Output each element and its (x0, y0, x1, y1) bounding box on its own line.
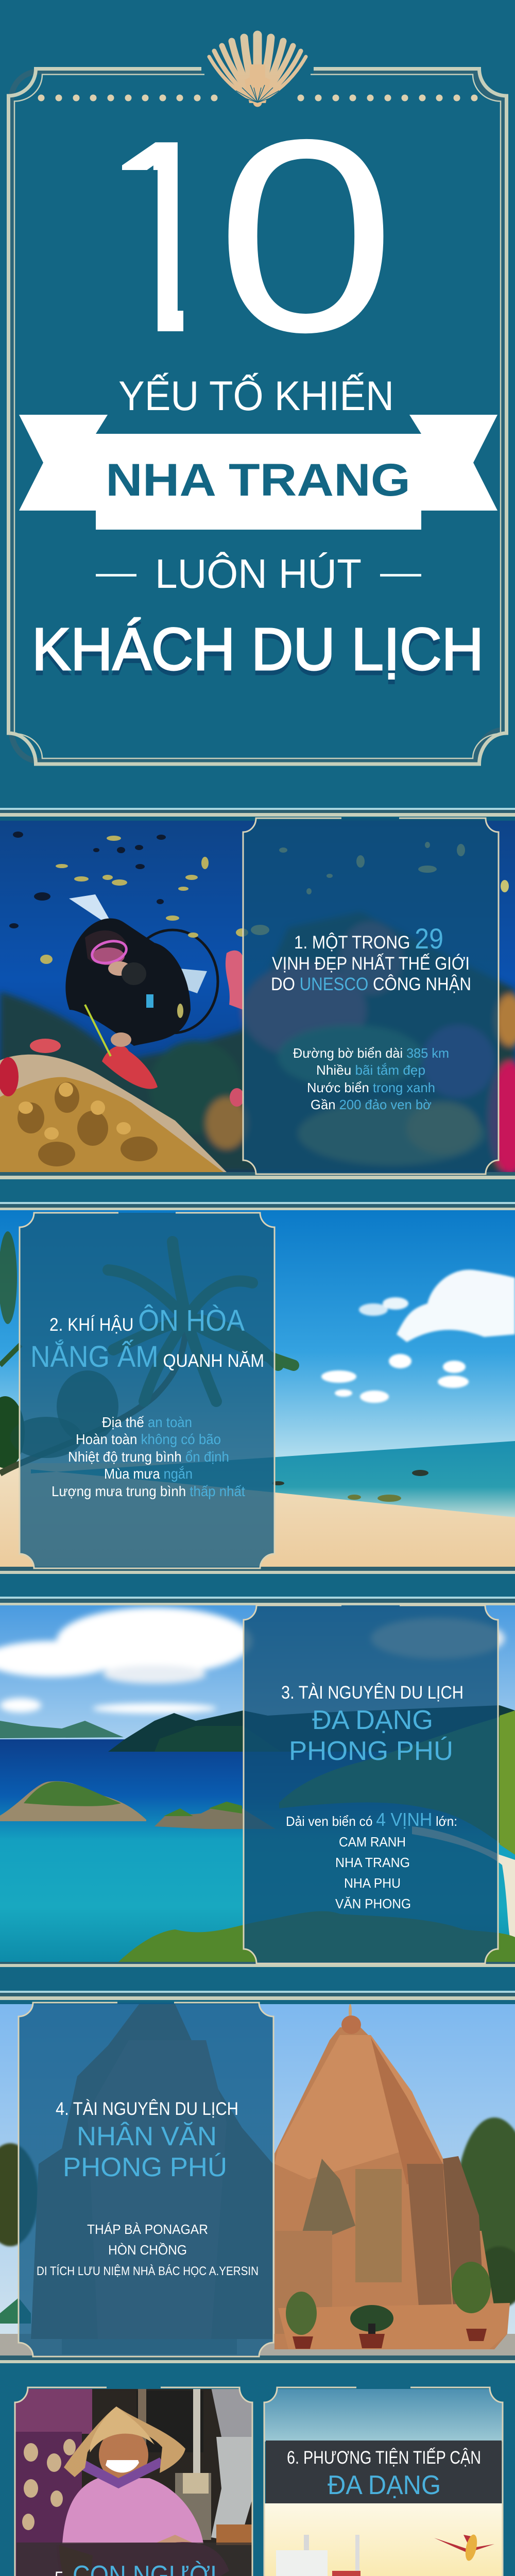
panel 1 details: Nhiều bãi tắm đẹp (316, 1062, 425, 1078)
palms (0, 1231, 294, 1473)
panel 2 heading: NẮNG ẤM QUANH NĂM (30, 1340, 264, 1374)
diver (65, 894, 218, 1056)
dark caption band (266, 2441, 502, 2503)
reef background (0, 912, 515, 1175)
fish behind panel (251, 842, 509, 935)
panel 5: people (15, 2387, 258, 2576)
decorative dots (38, 95, 478, 101)
panel 4 heading: PHONG PHÚ (63, 2153, 227, 2182)
panel 1 heading: 1. MỘT TRONG 29 (294, 922, 443, 955)
panel 3 heading: ĐA DẠNG (312, 1705, 433, 1735)
woman (62, 2478, 203, 2544)
section 3: bay photo (0, 1605, 515, 1965)
right forest (279, 1713, 515, 1855)
foliage (118, 1911, 515, 1965)
panel 6 frame (264, 2387, 503, 2576)
plane (434, 2533, 494, 2562)
photo: woman in conical hat (15, 2387, 258, 2576)
fish (40, 836, 248, 1018)
sea (31, 1441, 515, 1517)
number 10: 1 (84, 82, 237, 389)
number 10 (84, 82, 396, 389)
panel 2 details: Hoàn toàn không có bão (76, 1431, 221, 1447)
ribbon: NHA TRANG: NHA TRANG (106, 454, 410, 505)
panel 2 details: Mùa mưa ngắn (104, 1466, 193, 1482)
panel 2 heading (30, 1304, 264, 1374)
header: title block (8, 35, 507, 764)
icon: seashell (209, 35, 306, 103)
panel 2: climate (20, 1213, 274, 1568)
panel 4 details: THÁP BÀ PONAGAR (87, 2222, 208, 2237)
section 1: diver photo (0, 821, 515, 1175)
panel 1 heading (271, 922, 471, 994)
plants (286, 2262, 491, 2349)
panel 6: transport (264, 2387, 503, 2576)
main tower (274, 2027, 507, 2349)
panel 2 heading: 2. KHÍ HẬU ÔN HÒA (49, 1304, 245, 1337)
clouds (321, 1269, 515, 1403)
panel 3 details (286, 1809, 457, 1911)
coral (0, 951, 244, 1172)
panel 6 heading: ĐA DẠNG (328, 2470, 441, 2500)
panel 4 heading: NHÂN VĂN (77, 2122, 217, 2151)
panel 4: cultural heritage (19, 2003, 273, 2357)
panel 6 heading (287, 2447, 481, 2500)
panel 4 details (37, 2222, 259, 2278)
clouds (0, 1607, 505, 1714)
islands (0, 1781, 146, 1821)
panel 3 details: NHA TRANG (335, 1855, 410, 1870)
hills (0, 1721, 124, 1738)
section 2: beach photo (0, 1210, 515, 1569)
number 10: 0 (216, 82, 396, 389)
section 4: Ponagar tower photo (0, 2004, 515, 2357)
panel 3: diverse tourism (244, 1605, 498, 1963)
trees (0, 2117, 515, 2308)
panel 3 heading: PHONG PHÚ (289, 1736, 453, 1766)
panel 1 details: Gần 200 đảo ven bờ (311, 1097, 432, 1112)
panel 2 details: Lượng mưa trung bình thấp nhất (52, 1483, 245, 1499)
heading line: KHÁCH DU LỊCH: KHÁCH DU LỊCH (32, 620, 484, 687)
panel 5 frame (15, 2387, 252, 2576)
panel 3 details: CAM RANH (339, 1834, 406, 1850)
heading line: LUÔN HÚT: LUÔN HÚT (155, 551, 362, 597)
section band rules (0, 808, 515, 2363)
panel 3 details: Dải ven biển có 4 VỊNH lớn: (286, 1809, 457, 1830)
panel 1 heading: DO UNESCO CÔNG NHẬN (271, 974, 471, 994)
second tower (31, 2004, 273, 2339)
panel 4 heading: 4. TÀI NGUYÊN DU LỊCH (56, 2099, 238, 2119)
panel 3 details: VĂN PHONG (335, 1896, 411, 1911)
ornamental frame (8, 69, 507, 764)
photo: cargo ship and plane (264, 2387, 503, 2576)
panel 4 details: DI TÍCH LƯU NIỆM NHÀ BÁC HỌC A.YERSIN (37, 2264, 259, 2278)
panel 3 details: NHA PHU (344, 1875, 401, 1891)
panel 1 details (293, 1045, 449, 1112)
ribbon: NHA TRANG (19, 415, 497, 530)
panel 2 details: Địa thế an toàn (102, 1414, 192, 1430)
heading line: YẾU TỐ KHIẾN: YẾU TỐ KHIẾN (118, 372, 394, 419)
panel 1 details: Đường bờ biển dài 385 km (293, 1045, 449, 1061)
panel 1 heading: VỊNH ĐẸP NHẤT THẾ GIỚI (272, 953, 470, 974)
panel 3 heading (281, 1683, 464, 1766)
panel 4 details: HÒN CHỒNG (108, 2242, 187, 2258)
panel 2 details: Nhiệt độ trung bình ổn định (68, 1449, 229, 1465)
panel 3 heading: 3. TÀI NGUYÊN DU LỊCH (281, 1683, 464, 1703)
panel 4 heading (56, 2099, 238, 2182)
dark caption band (16, 2543, 252, 2576)
panel 1: UNESCO bay (243, 818, 499, 1174)
ship (276, 2550, 328, 2576)
panel 1 details: Nước biển trong xanh (307, 1080, 435, 1095)
heading line: KHÁCH DU LỊCH: KHÁCH DU LỊCH (32, 616, 484, 683)
heading line: LUÔN HÚT (96, 551, 421, 597)
panel 2 details (52, 1414, 245, 1499)
